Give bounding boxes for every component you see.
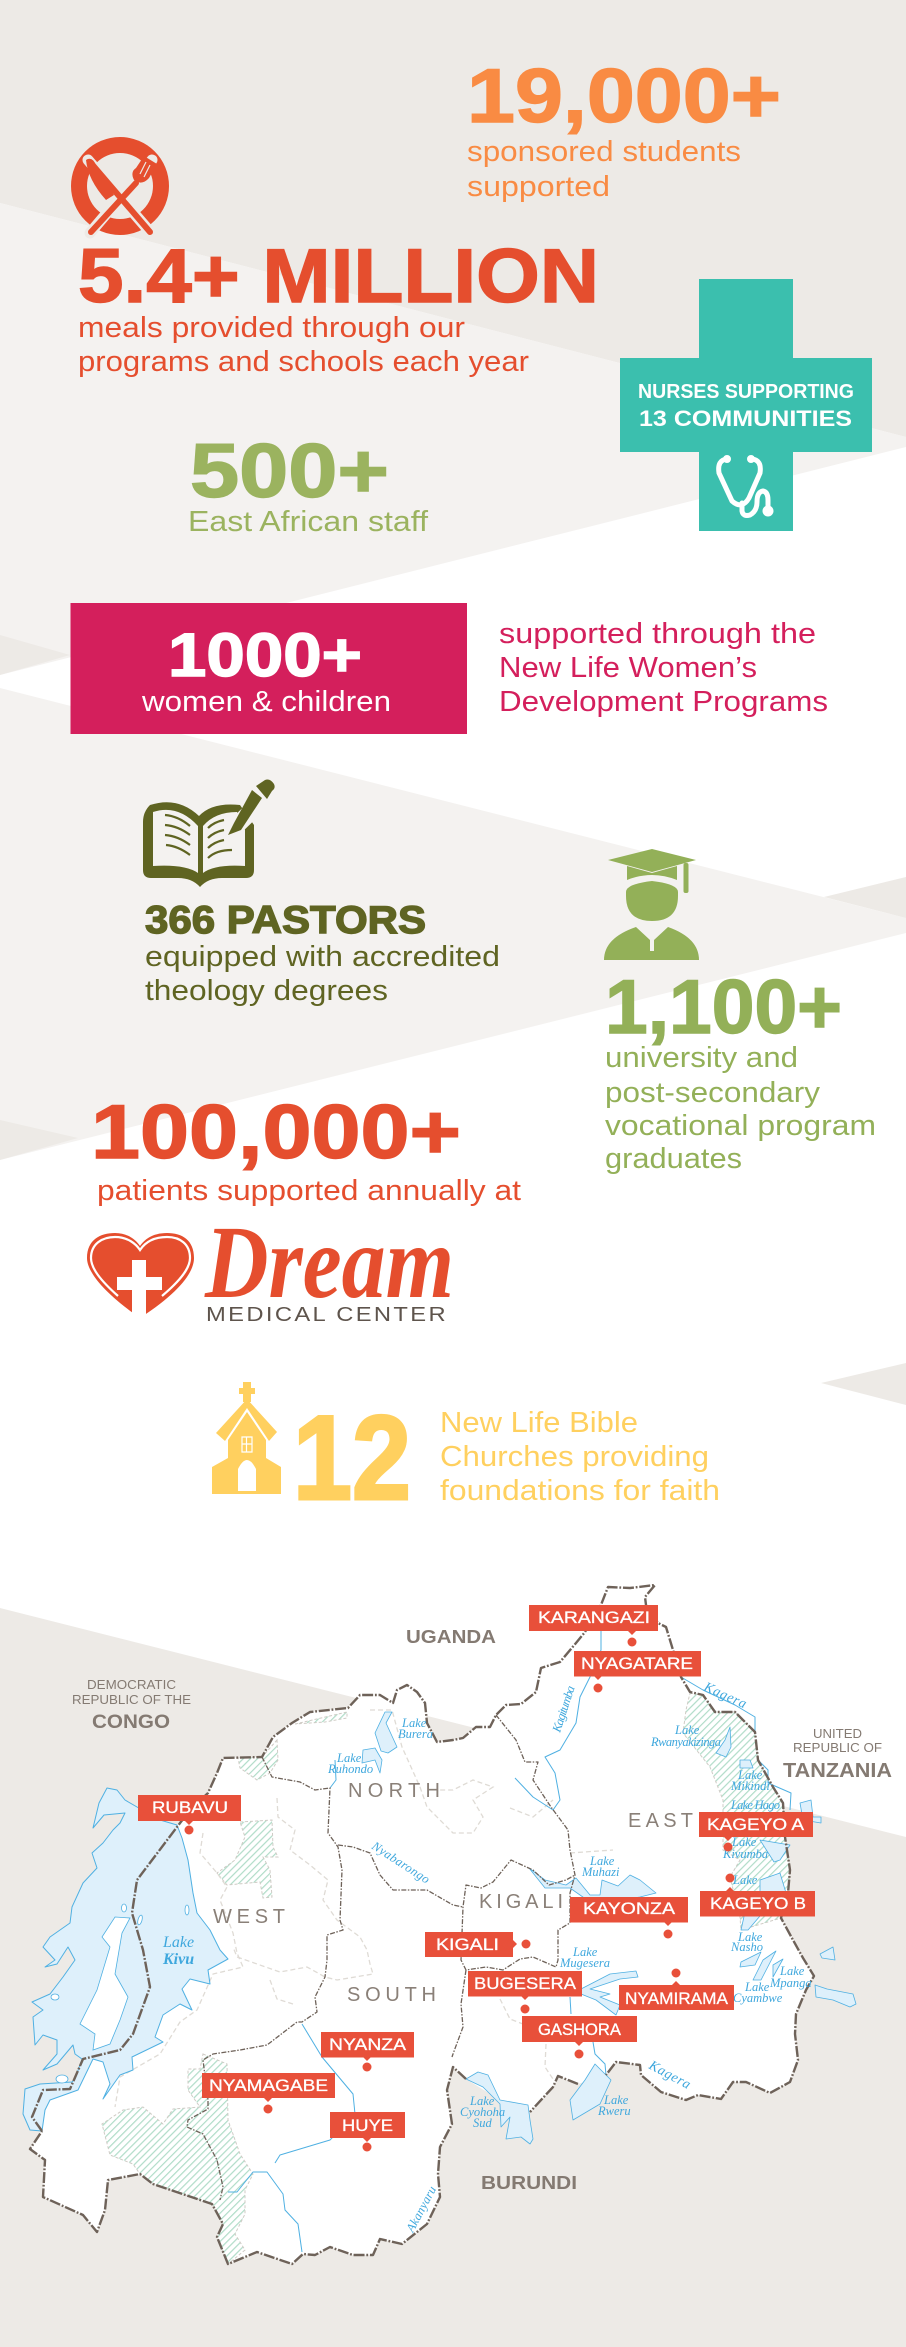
location: Kayonza [570, 1897, 688, 1938]
stat: meals provided: meals provided through our [78, 312, 465, 344]
stat: pastors [145, 899, 500, 1007]
lake and river labels: Kivumba [722, 1847, 768, 1861]
stat: meals provided: programs and schools each year [78, 346, 529, 378]
province labels: EAST [628, 1810, 693, 1832]
hatched protected areas [102, 1693, 790, 2264]
lake and river labels: Lake [603, 2093, 629, 2107]
panel: women and children: 1000+ [168, 621, 362, 689]
location: Nyanza [321, 2032, 414, 2072]
location: Rubavu [138, 1795, 241, 1834]
text: women's development programs: Development Programs [499, 686, 828, 718]
province labels: NORTH [348, 1780, 440, 1802]
icon: graduate with cap [604, 849, 699, 960]
country label: Uganda: UGANDA [406, 1627, 496, 1647]
logo: Dream Medical Center: Dream [204, 1205, 454, 1320]
panel: nurses cross: NURSES SUPPORTING [638, 381, 854, 403]
stat: pastors: 366 PASTORS [145, 899, 426, 942]
lake and river labels: Cyohoha [460, 2105, 505, 2119]
lake and river labels: Burera [398, 1727, 433, 1741]
lake and river labels: Nasho [730, 1940, 763, 1954]
lake and river labels: Lake [732, 1873, 758, 1887]
lake and river labels: Lake [336, 1751, 362, 1765]
location: Nyamagabe: NYAMAGABE [209, 2076, 328, 2095]
stat: university graduates: university and [605, 1042, 798, 1074]
stat: sponsored students: supported [467, 171, 610, 203]
country label: DR Congo: DEMOCRATIC [87, 1678, 176, 1692]
lake and river labels: Ruhondo [327, 1762, 373, 1776]
location: Karangazi [529, 1605, 658, 1646]
panel: nurses cross [620, 279, 872, 531]
lake and river labels: Kagera [700, 1680, 749, 1712]
location: Nyamirama: NYAMIRAMA [625, 1989, 729, 2008]
stat: patients supported: patients supported annually at [97, 1175, 521, 1207]
location: Kayonza: KAYONZA [583, 1899, 676, 1918]
stat: East African staff: 500+ [190, 429, 389, 514]
national border [30, 1585, 814, 2264]
lake and river labels: Mugesera [559, 1956, 610, 1970]
stat: East African staff [188, 429, 429, 538]
stat: university graduates: 1,100+ [605, 965, 842, 1050]
logo: Dream Medical Center: MEDICAL CENTER [206, 1304, 448, 1326]
lake and river labels: Mikindi [730, 1779, 770, 1793]
stat: sponsored students [467, 54, 781, 203]
location: Gashora: GASHORA [538, 2020, 622, 2039]
location: Kageyo A [699, 1812, 813, 1852]
lake and river labels: Mpanga [769, 1976, 812, 1990]
location: Karangazi: KARANGAZI [538, 1608, 650, 1627]
location: Kageyo B: KAGEYO B [710, 1894, 806, 1913]
stat: churches: foundations for faith [440, 1475, 720, 1507]
location: Bugesera [468, 1971, 582, 2014]
stat: churches: New Life Bible [440, 1407, 638, 1439]
location: Huye [330, 2112, 405, 2152]
panel: women and children: women & children [141, 686, 391, 718]
stat: churches [293, 1391, 720, 1525]
icon: church [212, 1382, 281, 1494]
lake: Kivu [23, 1788, 228, 2131]
stat: university graduates [605, 965, 876, 1175]
location: Nyagatare [574, 1651, 701, 1692]
lake and river labels: Lake [401, 1716, 427, 1730]
stat: sponsored students: 19,000+ [467, 54, 781, 139]
country label: Burundi: BURUNDI [481, 2173, 577, 2193]
lake and river labels: Akanyaru [403, 2184, 439, 2235]
panel: women and children [70, 603, 467, 734]
lake and river labels [162, 1680, 812, 2235]
country label: DR Congo: REPUBLIC OF THE [72, 1693, 191, 1707]
location: Bugesera: BUGESERA [474, 1974, 577, 1993]
lake and river labels: Lake [572, 1945, 598, 1959]
text: women's development programs [499, 618, 828, 718]
lake and river labels: Lake Hago [730, 1798, 780, 1812]
lake and river labels: Lake [779, 1964, 805, 1978]
lake and river labels: Lake [731, 1835, 757, 1849]
lake and river labels: Lake [744, 1980, 770, 1994]
location: Kageyo A: KAGEYO A [707, 1815, 805, 1834]
stat: East African staff: East African staff [188, 506, 429, 538]
lake and river labels: Lake [589, 1854, 615, 1868]
stat: churches: Churches providing [440, 1441, 709, 1473]
stat: sponsored students: sponsored students [467, 136, 741, 168]
location: Nyamagabe [202, 2073, 335, 2114]
stat: university graduates: vocational program [605, 1110, 876, 1142]
rivers [228, 1605, 791, 2252]
province labels [213, 1780, 693, 2006]
stat: university graduates: post-secondary [605, 1077, 821, 1109]
internal province boundaries [187, 1715, 575, 2200]
stat: pastors: theology degrees [145, 975, 388, 1007]
country label: DR Congo [72, 1678, 191, 1733]
lake and river labels: Kivu [162, 1951, 194, 1968]
lake and river labels: Sud [473, 2116, 492, 2130]
location: Nyanza: NYANZA [329, 2035, 407, 2054]
lake and river labels: Rwanyakizinga [650, 1735, 721, 1749]
lake and river labels: Muhazi [581, 1865, 620, 1879]
location: Nyamirama [619, 1968, 734, 2010]
location: Kageyo B [700, 1874, 815, 1916]
province labels: KIGALI [479, 1891, 563, 1913]
icon: open book and pencil [143, 780, 275, 887]
icon: stethoscope [719, 458, 771, 516]
lakes of the north, east and south [362, 1712, 856, 2144]
province labels: SOUTH [347, 1984, 436, 2006]
country label: Tanzania: REPUBLIC OF [793, 1741, 882, 1755]
lake and river labels: Lake [674, 1723, 700, 1737]
text: women's development programs: supported through the [499, 618, 816, 650]
logo: Dream Medical Center [87, 1205, 454, 1326]
stat: churches: 12 [293, 1391, 411, 1525]
land: Rwanda [30, 1585, 814, 2264]
stat: patients supported: 100,000+ [91, 1090, 461, 1175]
location: Kigali: KIGALI [436, 1935, 499, 1954]
location: Gashora [522, 2016, 637, 2058]
light sector boundaries [115, 1710, 613, 2107]
country label: Tanzania: TANZANIA [783, 1760, 892, 1782]
lake and river labels: Lake [737, 1930, 763, 1944]
province labels: WEST [213, 1906, 285, 1928]
map of Rwanda [23, 1585, 892, 2264]
stat: pastors: equipped with accredited [145, 941, 500, 973]
panel: nurses cross: 13 COMMUNITIES [639, 406, 852, 431]
lake and river labels: Lake [469, 2094, 495, 2108]
lake and river labels: Nyabarongo [369, 1838, 432, 1886]
lake and river labels: Kagitumba [549, 1684, 578, 1735]
location: Rubavu: RUBAVU [152, 1798, 228, 1817]
lake and river labels: Rweru [597, 2104, 631, 2118]
stat: meals provided: 5.4+ MILLION [78, 234, 599, 319]
country label: DR Congo: CONGO [92, 1712, 170, 1733]
country label: Tanzania [783, 1727, 892, 1782]
Idjwi island and islets [51, 1904, 189, 2083]
location: Huye: HUYE [342, 2116, 393, 2135]
location: Kigali [425, 1932, 530, 1957]
stat: meals provided [78, 234, 599, 378]
lake and river labels: Kagera [645, 2058, 693, 2093]
lake and river labels: Lake [162, 1934, 194, 1951]
stat: patients supported [91, 1090, 521, 1207]
lake and river labels: Cyambwe [733, 1991, 783, 2005]
text: women's development programs: New Life Women’s [499, 652, 757, 684]
icon: plate with knife and fork [71, 137, 169, 235]
stat: university graduates: graduates [605, 1143, 742, 1175]
country label: Tanzania: UNITED [813, 1727, 862, 1741]
location: Nyagatare: NYAGATARE [581, 1654, 693, 1673]
lake and river labels: Lake [737, 1768, 763, 1782]
